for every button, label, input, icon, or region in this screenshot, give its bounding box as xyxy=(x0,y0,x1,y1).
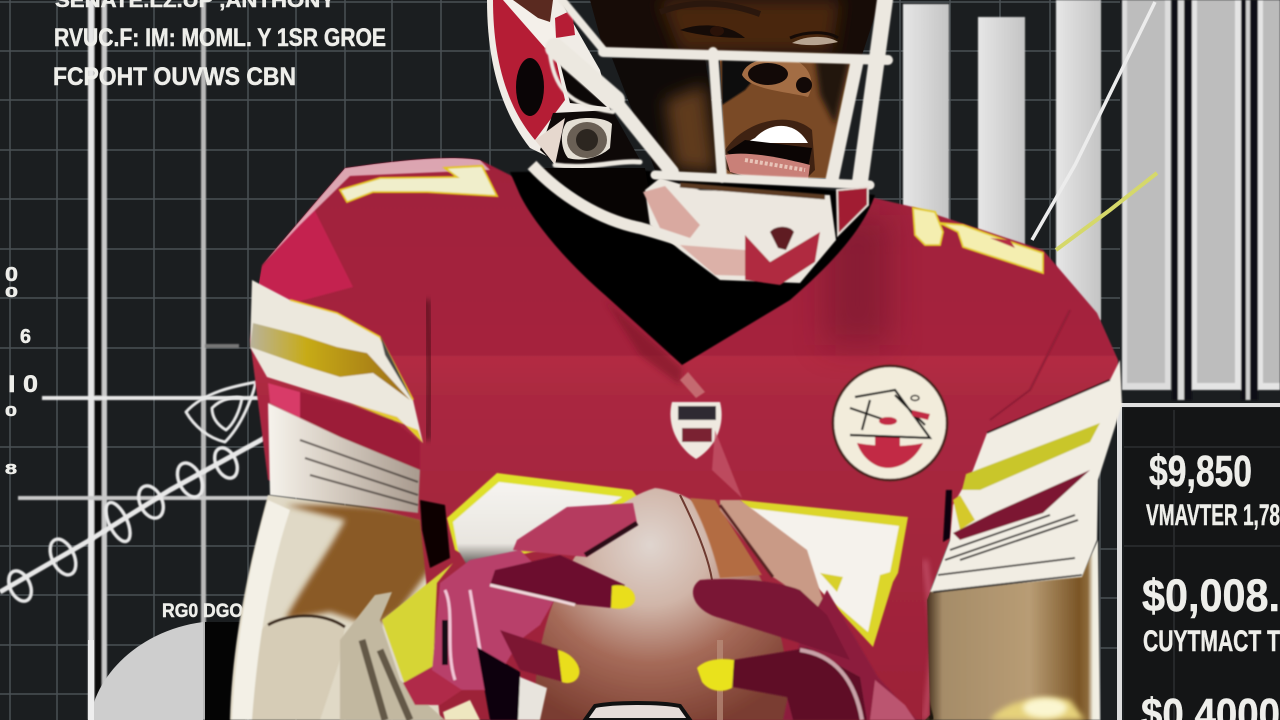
shoulder number left xyxy=(340,166,497,202)
line chart with football markers xyxy=(0,382,270,605)
face right xyxy=(720,60,855,178)
bar chart: right side bars xyxy=(903,0,1280,400)
heading line 3: FCPOHT OUVWS CBN xyxy=(53,63,296,91)
upper finger xyxy=(720,500,827,613)
player xyxy=(230,0,1122,720)
y-axis labels: 0 xyxy=(5,403,17,420)
wrist band xyxy=(382,563,460,690)
wrist wrap xyxy=(340,592,445,720)
figure: first value: $9,850 xyxy=(1149,447,1252,496)
football xyxy=(535,488,790,720)
chest number xyxy=(447,473,908,647)
left cuff xyxy=(268,403,420,513)
area chart shape xyxy=(90,622,203,720)
fingers xyxy=(513,503,637,557)
facemask bars xyxy=(550,0,888,185)
glove body xyxy=(783,590,917,720)
black gap xyxy=(477,647,520,720)
white chart axes xyxy=(18,0,270,720)
y-axis labels: 8 xyxy=(5,461,17,478)
black under helmet xyxy=(540,168,655,228)
right arm xyxy=(925,540,1100,720)
collar fold xyxy=(605,300,682,385)
right sleeve xyxy=(930,360,1122,592)
middle finger xyxy=(693,579,850,660)
panel: contract figures xyxy=(1117,403,1280,720)
face upper xyxy=(590,0,880,55)
football outline icon xyxy=(186,382,256,442)
neck shadow xyxy=(510,170,875,365)
ball logo xyxy=(585,703,690,720)
y-axis labels: 0 xyxy=(5,284,18,301)
jersey shading xyxy=(255,158,1070,720)
chin cup xyxy=(643,178,868,285)
heading text xyxy=(53,0,386,91)
chart label: RG0 DGO. xyxy=(162,601,248,622)
shoulder number right xyxy=(913,208,1043,273)
lower finger xyxy=(733,648,867,720)
eyes xyxy=(680,25,745,38)
y-axis labels: 0 xyxy=(5,264,18,286)
jersey body xyxy=(250,158,1120,720)
face left cheek xyxy=(612,58,722,175)
mouth xyxy=(725,120,815,180)
right glove xyxy=(693,500,917,720)
nose xyxy=(742,58,812,97)
trend lines on bars xyxy=(1032,2,1157,250)
helmet shell xyxy=(487,0,615,172)
league shield xyxy=(670,372,742,498)
team patch xyxy=(833,366,947,480)
helmet and face xyxy=(487,0,888,285)
dark gap in mask xyxy=(560,63,607,107)
left sleeve xyxy=(250,280,423,513)
left glove xyxy=(340,503,637,720)
palm xyxy=(432,550,560,690)
y-axis labels: I 0 xyxy=(8,371,38,398)
left arm xyxy=(230,495,460,720)
y-axis labels: 6 xyxy=(20,326,31,348)
heading line 2: RVUC.F: IM: MOML. Y 1SR GROE xyxy=(54,24,386,52)
ear hole xyxy=(540,110,640,168)
chin strap xyxy=(532,165,695,245)
y-axis labels xyxy=(5,264,38,478)
